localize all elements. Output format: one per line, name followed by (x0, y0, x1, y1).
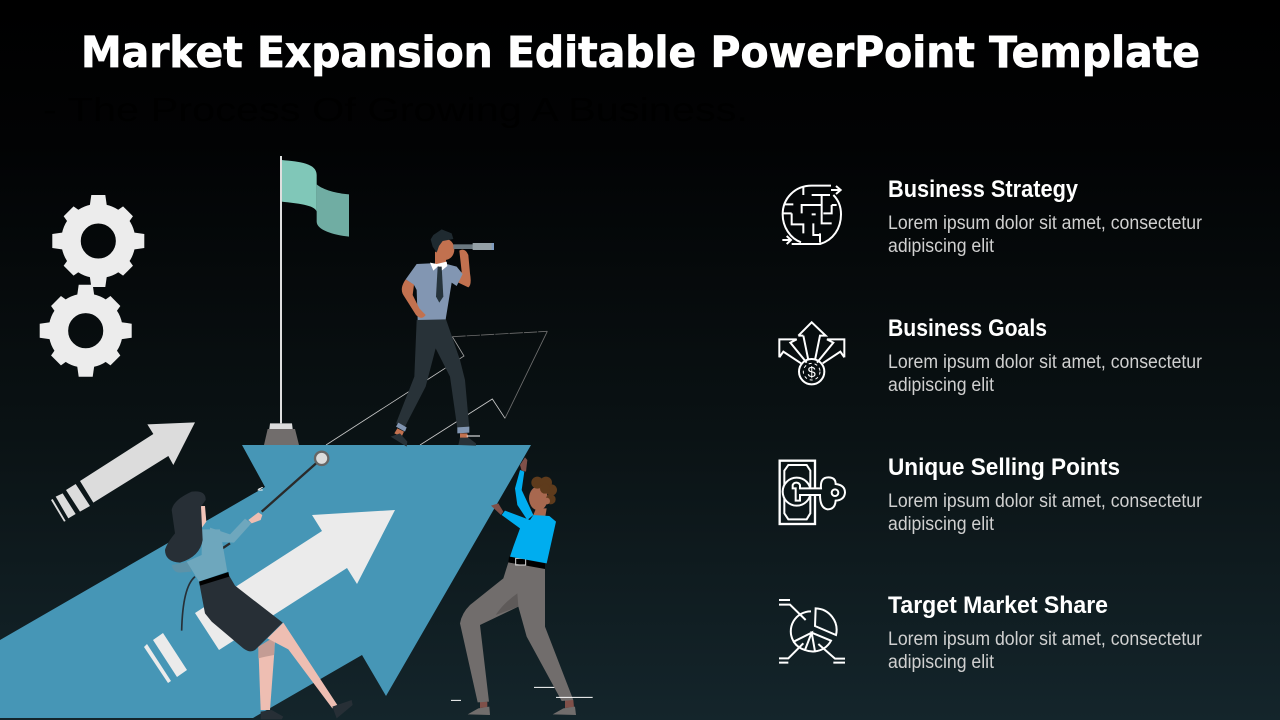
row 2: business goals (779, 315, 1203, 396)
hair (531, 477, 557, 504)
heading: Target Market Share (888, 592, 1108, 619)
hidden subtitle: - The Process Of Growing A Business. (43, 91, 748, 128)
man pushing arrow (451, 457, 593, 715)
heading: Business Goals (888, 315, 1047, 342)
large blue arrow (0, 445, 531, 718)
row 1: business strategy (782, 176, 1203, 257)
outlined background chart arrow (326, 331, 547, 445)
description: adipiscing elit (888, 375, 995, 396)
grey arrow with stripes (51, 422, 195, 522)
description: adipiscing elit (888, 236, 995, 257)
description: Lorem ipsum dolor sit amet, consectetur (888, 352, 1203, 373)
icon: goal arrows with dollar (779, 322, 844, 384)
description: adipiscing elit (888, 652, 995, 673)
flag and pole (264, 156, 349, 445)
icon: banknote with key (780, 461, 845, 524)
icon: maze (782, 186, 841, 244)
white arrow on blue (195, 510, 395, 650)
description: adipiscing elit (888, 514, 995, 535)
icon: pie chart (779, 600, 845, 663)
icon: goal arrows with dollar: $ (808, 365, 816, 381)
gear: upper (52, 195, 144, 287)
description: Lorem ipsum dolor sit amet, consectetur (888, 213, 1203, 234)
white stripes (144, 633, 187, 683)
heading: Business Strategy (888, 176, 1079, 203)
title: Market Expansion Editable PowerPoint Template (81, 28, 1200, 78)
description: Lorem ipsum dolor sit amet, consectetur (888, 629, 1203, 650)
heading: Unique Selling Points (888, 454, 1120, 481)
gear: lower (40, 285, 132, 377)
row 3: unique selling points (780, 454, 1203, 535)
woman pulling rope (165, 452, 353, 719)
row 4: target market share (779, 592, 1203, 673)
man with telescope (391, 229, 494, 447)
description: Lorem ipsum dolor sit amet, consectetur (888, 491, 1203, 512)
